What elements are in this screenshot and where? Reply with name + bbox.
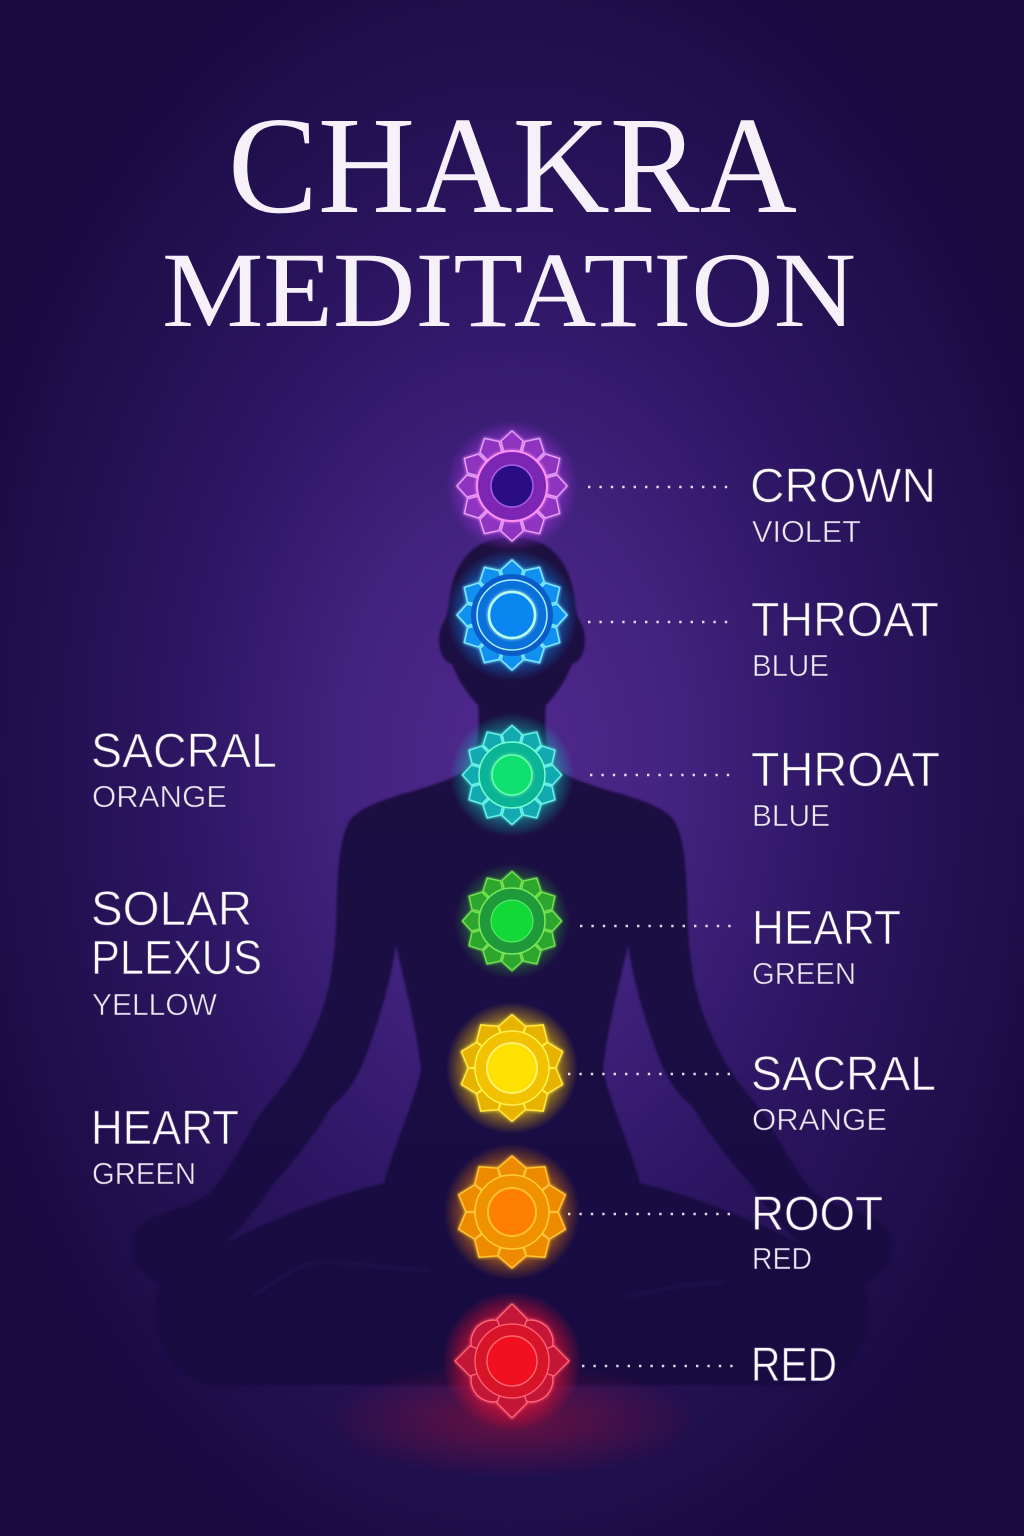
colour: BLUE bbox=[752, 648, 829, 683]
lotus petals bbox=[457, 560, 567, 670]
dotted leader: teal bbox=[590, 774, 736, 776]
dotted leader: crown bbox=[588, 486, 736, 488]
colour: GREEN bbox=[92, 1156, 196, 1191]
lotus petals bbox=[462, 726, 562, 824]
colour: YELLOW bbox=[92, 987, 218, 1022]
label: crown violet bbox=[750, 460, 936, 549]
colour: RED bbox=[752, 1241, 812, 1276]
name line 2: PLEXUS bbox=[91, 932, 262, 985]
inner ring bbox=[477, 580, 547, 650]
label: red: RED bbox=[751, 1339, 837, 1392]
chakra: green bbox=[454, 863, 570, 979]
name: HEART bbox=[91, 1102, 239, 1155]
title line: CHAKRA: CHAKRA bbox=[228, 89, 797, 243]
core bbox=[492, 755, 532, 795]
leg fold right bbox=[626, 1283, 725, 1297]
glow bbox=[450, 713, 574, 837]
colour: BLUE bbox=[752, 798, 830, 833]
colour: ORANGE bbox=[752, 1102, 887, 1137]
dotted leader: yellow bbox=[568, 1073, 736, 1075]
name: CROWN bbox=[750, 460, 936, 513]
lotus petals bbox=[457, 1015, 567, 1121]
core bbox=[488, 1188, 536, 1236]
name: HEART bbox=[752, 902, 901, 955]
label: sacral orange bbox=[751, 1048, 936, 1137]
name: THROAT bbox=[751, 594, 939, 647]
chakra: crown violet bbox=[446, 420, 578, 552]
name: SACRAL bbox=[91, 725, 277, 778]
glow bbox=[454, 863, 570, 979]
dotted leader: red bbox=[582, 1365, 736, 1367]
ring bbox=[479, 742, 545, 808]
dotted leader: green bbox=[580, 925, 736, 927]
lotus petals bbox=[455, 1304, 569, 1418]
chakra: teal bbox=[450, 713, 574, 837]
label: left heart green bbox=[91, 1102, 239, 1191]
colour: VIOLET bbox=[752, 514, 861, 549]
chakra: yellow bbox=[446, 1002, 578, 1134]
glow bbox=[446, 549, 578, 681]
silhouette: seated meditating figure bbox=[132, 537, 892, 1385]
chakra: blue bbox=[446, 549, 578, 681]
lotus petals bbox=[462, 872, 562, 970]
label: root red bbox=[751, 1188, 883, 1276]
name: SACRAL bbox=[751, 1048, 936, 1101]
chakra: red bbox=[442, 1291, 582, 1431]
glow bbox=[442, 1291, 582, 1431]
ring bbox=[475, 1031, 549, 1105]
ring bbox=[477, 451, 547, 521]
label: heart green bbox=[752, 902, 901, 991]
label: left solar plexus yellow bbox=[91, 883, 262, 1022]
floor glow bbox=[322, 1362, 702, 1478]
colour: ORANGE bbox=[92, 779, 227, 814]
core bbox=[491, 465, 533, 507]
ring bbox=[475, 1324, 549, 1398]
name: ROOT bbox=[751, 1188, 883, 1241]
glow bbox=[446, 420, 578, 552]
chakra: orange bbox=[444, 1144, 580, 1280]
label: throat blue bbox=[751, 594, 939, 683]
label: throat blue second bbox=[751, 744, 940, 833]
leg fold left bbox=[253, 1262, 430, 1295]
core bbox=[487, 1336, 537, 1386]
glow bbox=[444, 1144, 580, 1280]
core bbox=[487, 1043, 537, 1093]
body shape bbox=[132, 537, 892, 1385]
dotted leader: orange bbox=[568, 1213, 736, 1215]
title line: MEDITATION: MEDITATION bbox=[162, 232, 856, 350]
lotus petals bbox=[457, 431, 567, 541]
dotted leader: blue bbox=[588, 621, 736, 623]
ring bbox=[479, 888, 545, 954]
name line 1: SOLAR bbox=[91, 883, 252, 936]
glow bbox=[446, 1002, 578, 1134]
ring bbox=[475, 1175, 549, 1249]
core bbox=[491, 900, 533, 942]
label: left sacral orange bbox=[91, 725, 277, 814]
colour: GREEN bbox=[752, 956, 856, 991]
lotus petals bbox=[454, 1156, 570, 1268]
core bbox=[489, 592, 535, 638]
title bbox=[162, 89, 856, 350]
outer dark ring bbox=[471, 574, 553, 656]
name: THROAT bbox=[751, 744, 940, 797]
